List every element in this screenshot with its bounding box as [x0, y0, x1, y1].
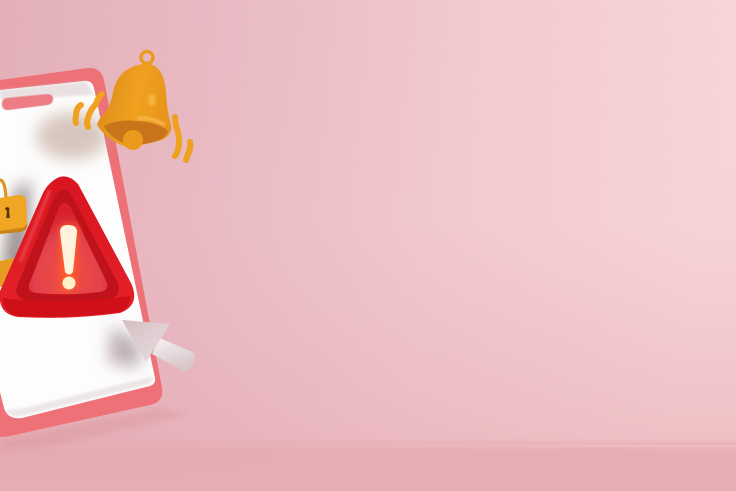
screen shadow from triangle: [2, 180, 30, 290]
second padlock piece: [0, 258, 14, 287]
icon: bell: [97, 52, 171, 150]
phone screen: [0, 81, 155, 418]
screen shadow from cursor: [108, 325, 142, 368]
cursor shaft: [152, 338, 195, 371]
triangle lower shade: [2, 296, 130, 317]
bell body: [97, 64, 171, 148]
phone floor shadow: [2, 410, 179, 448]
icon: right vibration marks: [175, 117, 190, 160]
bell clapper: [123, 130, 143, 150]
floor band: [0, 438, 736, 491]
speaker pill: [2, 94, 53, 110]
icon: padlock: [0, 180, 27, 287]
screen shadow from bell: [36, 112, 108, 160]
bell rim light: [138, 118, 165, 125]
triangle inner face: [29, 203, 107, 294]
bell opening: [104, 121, 168, 144]
icon: left vibration marks: [76, 94, 102, 127]
bell highlight: [148, 94, 156, 106]
phone: [0, 68, 190, 450]
cursor head: [122, 320, 170, 362]
phone body: [0, 68, 162, 437]
screen lower edge shading: [6, 376, 154, 416]
triangle mid rim: [16, 190, 119, 301]
triangle highlight: [20, 190, 50, 262]
screen upper edge shading: [0, 81, 94, 100]
icon: warning triangle: [0, 176, 134, 318]
icon: exclamation mark: [59, 224, 79, 290]
bell loop: [141, 52, 153, 64]
icon: cursor arrow: [122, 320, 195, 371]
